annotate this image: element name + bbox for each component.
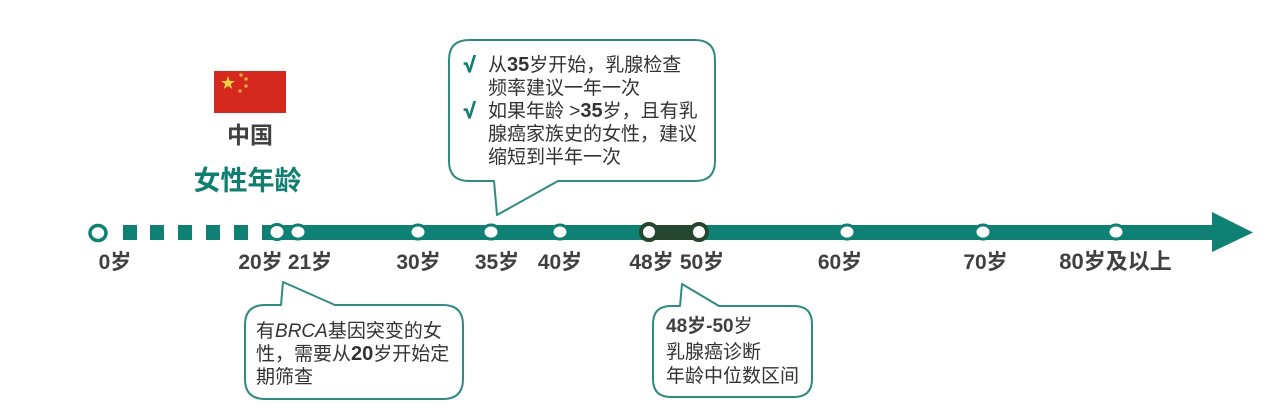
heading: women's age: 女性年龄 (194, 166, 302, 196)
age labels: 30岁 (396, 251, 441, 274)
callout: screening from 35: √ (464, 54, 476, 77)
callout: screening from 35 (449, 40, 715, 215)
callout: screening from 35: 如果年龄 >35岁，且有乳 (488, 100, 698, 122)
age labels: 70岁 (963, 251, 1008, 274)
callout: median diagnosis age: 乳腺癌诊断 (666, 341, 761, 363)
callout: BRCA mutation: 性，需要从20岁开始定 (256, 343, 449, 365)
heading: country: 中国 (227, 122, 273, 148)
highlighted segment: ages 48 to 50 (648, 225, 699, 240)
age nodes (90, 224, 1124, 240)
flag: China (214, 71, 286, 113)
callout: median diagnosis age (653, 284, 812, 397)
callout: median diagnosis age: 48岁-50岁 (666, 315, 753, 337)
age labels: 21岁 (288, 251, 332, 274)
age labels: 80岁及以上 (1059, 249, 1172, 274)
dashed segment: ages 0 to 20 (123, 225, 248, 240)
callout: screening from 35: √ (464, 100, 476, 123)
age labels: 35岁 (475, 251, 519, 274)
callout: BRCA mutation: 有BRCA基因突变的女 (256, 320, 442, 342)
age labels: 40岁 (538, 251, 582, 274)
age labels: 20岁 (238, 251, 283, 274)
callout: screening from 35: 从35岁开始，乳腺检查 (488, 54, 681, 76)
timeline axis (90, 212, 1253, 252)
axis arrow (262, 212, 1253, 252)
callout: screening from 35: 腺癌家族史的女性，建议 (488, 123, 697, 145)
age labels: 50岁 (680, 251, 724, 274)
callout: BRCA mutation (245, 282, 463, 399)
age labels: 0岁 (99, 251, 131, 274)
age labels: 60岁 (818, 251, 862, 274)
age labels: 48岁 (629, 251, 674, 274)
callout: median diagnosis age: 年龄中位数区间 (666, 365, 799, 387)
callout: screening from 35: 缩短到半年一次 (488, 146, 621, 168)
age labels (99, 249, 1172, 274)
callout: BRCA mutation: 期筛查 (256, 366, 313, 388)
callout: screening from 35: 频率建议一年一次 (488, 77, 640, 99)
